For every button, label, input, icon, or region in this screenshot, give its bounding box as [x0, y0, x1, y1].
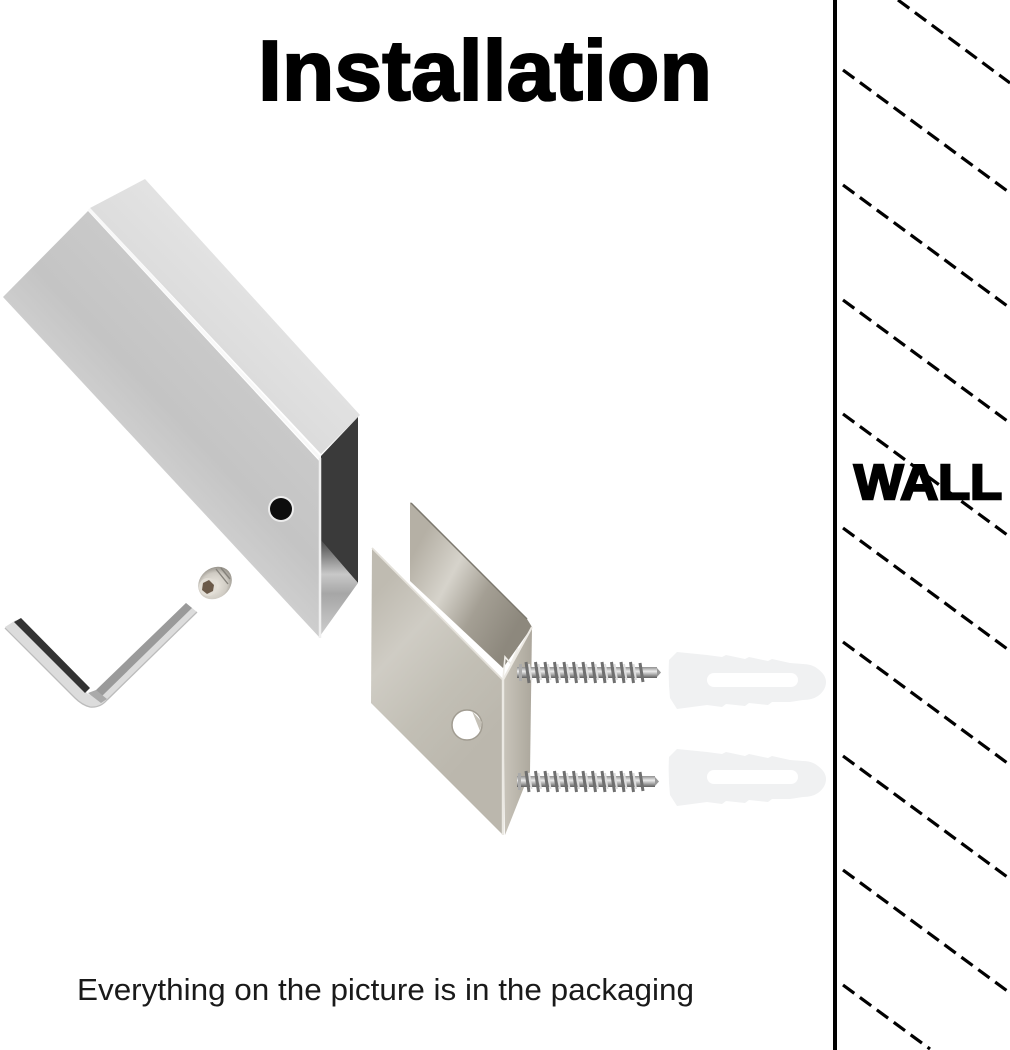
lower wall plug	[669, 749, 826, 806]
wall label: WALL	[854, 456, 1002, 510]
wall bracket	[371, 502, 532, 835]
bright edge highlight	[89, 209, 320, 458]
lower screw	[517, 771, 659, 792]
side strip	[503, 627, 532, 835]
front face	[3, 211, 320, 638]
grub screw	[192, 560, 238, 606]
back plate	[410, 502, 532, 668]
upper screw	[517, 662, 661, 683]
sleeve opening	[320, 417, 358, 583]
hex key	[5, 603, 197, 707]
bracket through hole	[452, 710, 482, 740]
top face	[90, 179, 360, 454]
title: Installation	[258, 24, 712, 119]
hook cover: chrome rectangular sleeve	[3, 179, 360, 638]
wall hatching	[843, 0, 1010, 1049]
wall outline	[833, 0, 837, 1050]
bracket corner fold	[503, 648, 518, 680]
upper wall plug	[669, 652, 826, 709]
front plate	[371, 548, 503, 835]
sleeve inner floor	[320, 540, 358, 636]
sleeve screw hole	[268, 496, 294, 522]
caption: Everything on the picture is in the packaging	[77, 972, 694, 1007]
